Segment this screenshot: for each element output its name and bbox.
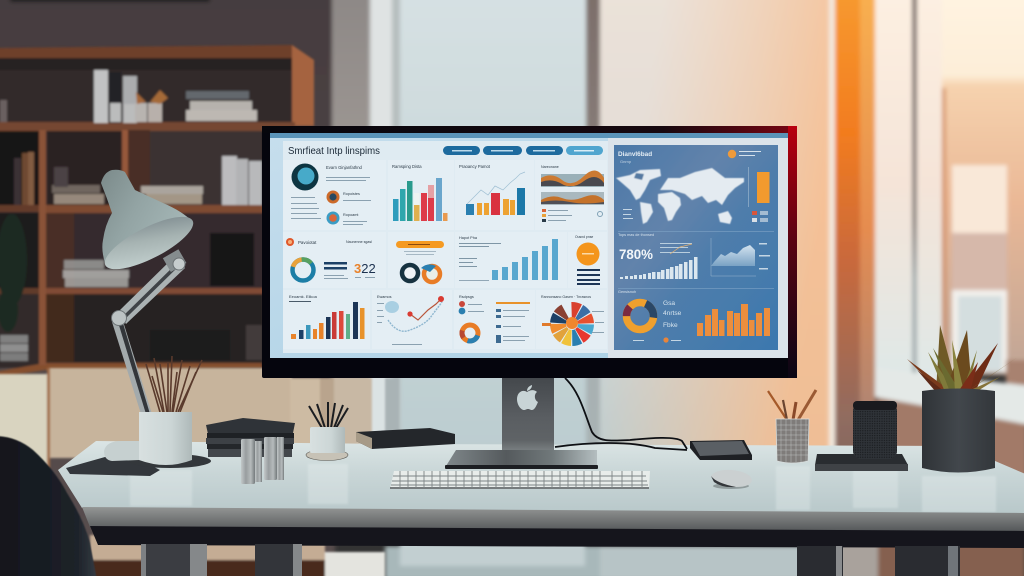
big stat: 780% xyxy=(619,246,654,262)
orange donut xyxy=(626,302,654,330)
dashboard content xyxy=(283,145,778,350)
portable drive xyxy=(690,440,752,460)
panel: summary xyxy=(283,160,386,230)
monitor screen xyxy=(270,133,788,358)
area chart xyxy=(711,238,770,276)
cabinet under shelf xyxy=(0,368,399,576)
blurred plant on shelf xyxy=(0,214,27,332)
panel: mixed list: Rsdpsgs xyxy=(459,295,474,299)
panel: rising bars xyxy=(283,290,370,349)
map legend xyxy=(623,209,768,222)
donut labels: Gsa xyxy=(663,300,675,307)
donut chart small xyxy=(462,325,478,341)
panel: sunburst: Rannonsano Gasen · Tnrasnos xyxy=(541,295,591,299)
orange bar chart xyxy=(697,304,770,336)
saucer xyxy=(306,450,348,460)
pot xyxy=(139,412,192,465)
panel: trend map: Ewamos xyxy=(377,295,392,299)
cable xyxy=(555,378,687,450)
stand base xyxy=(446,450,597,466)
section label: Gensisnoh xyxy=(618,290,636,294)
pencils xyxy=(768,390,816,420)
desk underside xyxy=(90,526,1024,548)
dashboard heading: Dianvl6bad xyxy=(618,151,652,158)
donut labels: Fbke xyxy=(663,322,678,329)
summary sub labels: Ropoistes xyxy=(343,192,360,196)
knob xyxy=(104,441,139,461)
panel: KPI donut: Naunenne sgasl xyxy=(346,240,372,244)
lamp joint xyxy=(112,310,126,326)
stacked notebooks xyxy=(206,418,295,457)
plant pot xyxy=(922,388,995,472)
panel: rings xyxy=(388,232,454,288)
panel: mixed list xyxy=(454,290,535,349)
panel: summary: Ropoamt xyxy=(343,213,359,217)
stand neck xyxy=(502,378,554,451)
speaker xyxy=(853,401,897,459)
lamp upper arm xyxy=(118,256,185,324)
desk xyxy=(58,441,1024,576)
panel: blue dashboard xyxy=(614,145,778,350)
icon: orange dot xyxy=(728,150,736,158)
panel: wave charts: Nareonane xyxy=(541,165,559,169)
panel: KPI donut xyxy=(283,232,386,288)
cup xyxy=(310,427,345,453)
panel: blue dashboard: Gnrnp xyxy=(620,159,632,164)
monitor stand xyxy=(445,378,598,469)
monitor xyxy=(262,126,797,378)
icon: orange badge xyxy=(286,238,294,246)
panel: rising bars: Eeoamk. Elikoa xyxy=(289,294,318,299)
panel: orange stat: Ousnd pnse xyxy=(575,235,593,239)
brush pot with sticks xyxy=(66,356,211,476)
panel: orange stat xyxy=(568,232,607,288)
panel: blue bar chart: Hapot Pha xyxy=(459,236,478,240)
silver cylinders xyxy=(241,437,284,484)
lamp shade opening xyxy=(98,207,200,279)
chair back xyxy=(0,436,97,576)
panel: blue bar chart xyxy=(455,232,567,288)
panel: combo chart: Praoancy Pamot xyxy=(459,164,491,169)
cup xyxy=(776,419,809,463)
world map xyxy=(616,168,744,224)
donut labels: 4nrtse xyxy=(663,310,682,317)
KPI number: 322 xyxy=(354,261,376,276)
book under speaker xyxy=(815,454,908,471)
panel: wave charts xyxy=(535,160,607,230)
black notebook xyxy=(356,428,455,449)
reflections xyxy=(130,464,996,512)
panel: bar chart 1 xyxy=(388,160,454,230)
desk legs xyxy=(141,544,960,576)
icon: blue ring xyxy=(326,212,340,224)
pens xyxy=(309,402,348,428)
panel: KPI donut: Pavoiotat xyxy=(298,240,317,245)
bookshelf xyxy=(0,45,314,378)
donut chart xyxy=(292,164,318,190)
icon: apple logo xyxy=(517,385,538,410)
book under pot xyxy=(66,457,160,476)
lamp lower arm xyxy=(112,318,152,414)
panel: trend map xyxy=(372,290,452,349)
summary text lines xyxy=(291,177,370,219)
plant xyxy=(907,325,1018,392)
lamp shade xyxy=(101,170,193,268)
panel: bar chart 1: Ramsping Dista xyxy=(392,164,422,169)
white bar chart xyxy=(620,257,698,279)
sticks xyxy=(146,356,202,412)
small pen cup xyxy=(306,402,348,460)
desk fascia xyxy=(82,507,1024,533)
desk surface xyxy=(58,441,1024,520)
mouse xyxy=(711,470,752,489)
header buttons xyxy=(443,146,603,155)
multi colour donut xyxy=(292,260,314,280)
desk lamp xyxy=(98,170,200,414)
lamp head joint xyxy=(163,249,186,272)
saucer xyxy=(129,454,211,468)
monitor bezel xyxy=(262,126,797,378)
donut labels xyxy=(663,300,682,329)
mesh pencil cup xyxy=(768,390,816,463)
keyboard xyxy=(390,471,650,489)
summary heading: Evarn Ginjanfathnd xyxy=(326,165,363,170)
section label: Tops mas de thonsed xyxy=(618,233,654,237)
orange vertical bar xyxy=(757,172,770,203)
icon: orange ring xyxy=(326,190,340,204)
KPI bars xyxy=(324,262,347,270)
shelf books xyxy=(0,70,262,361)
panel: sunburst xyxy=(536,290,607,349)
dashboard title: Smrfieat Intp linspims xyxy=(288,145,380,157)
panel: combo chart xyxy=(455,160,534,230)
